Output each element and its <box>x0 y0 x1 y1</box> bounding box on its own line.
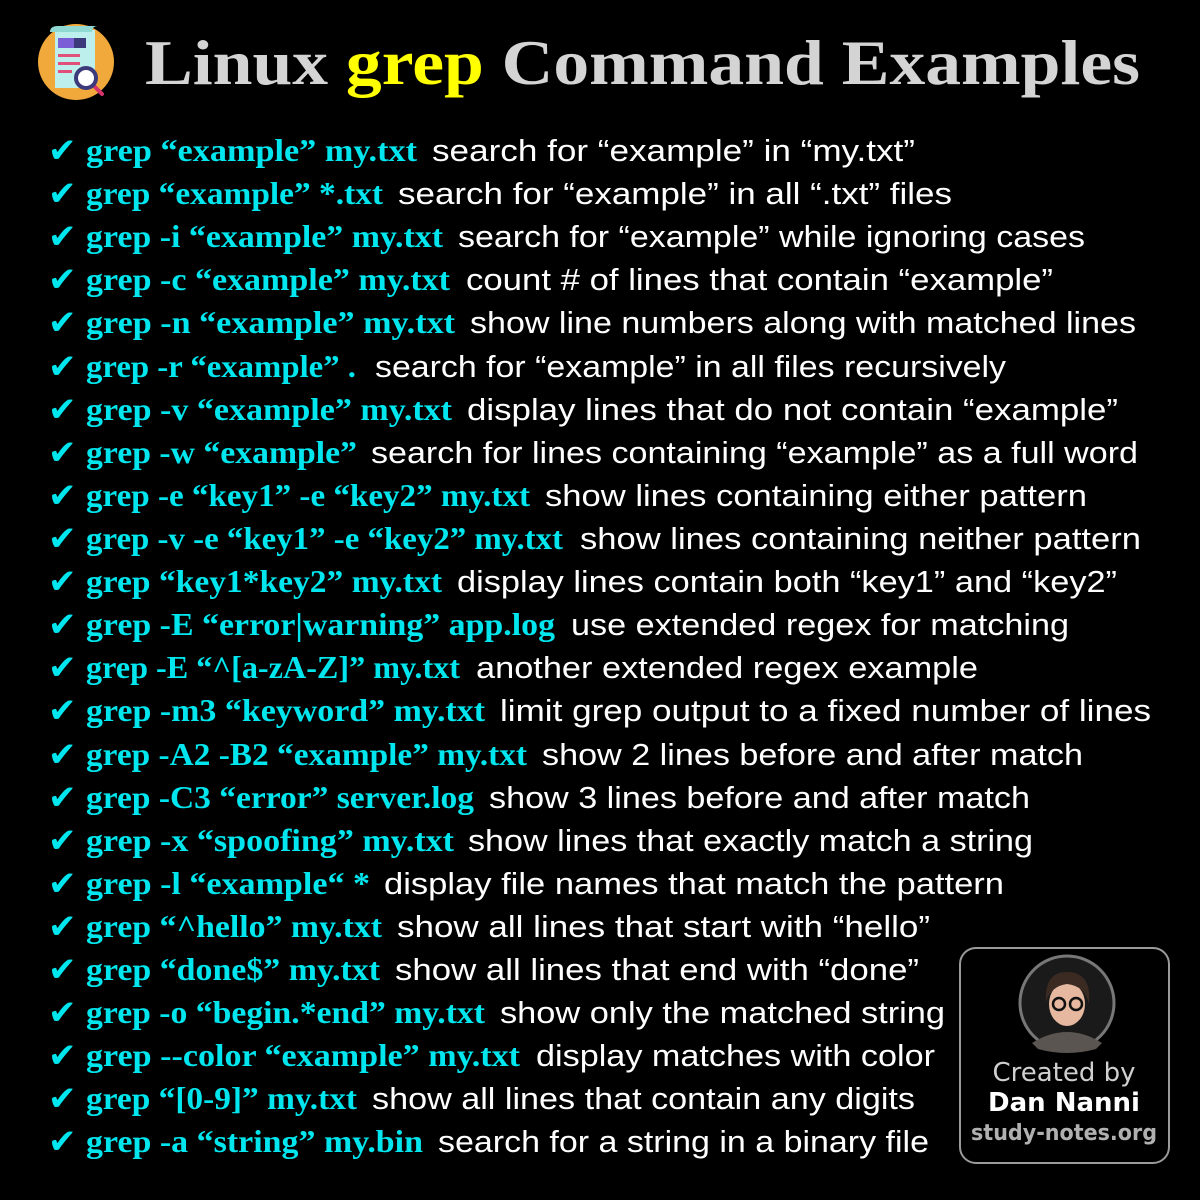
command list: ✔ <box>48 993 76 1033</box>
command list: grep “key1*key2” my.txt <box>86 563 442 599</box>
command list: display file names that match the pattern <box>384 866 1004 901</box>
command list: ✔ <box>48 864 76 904</box>
avatar <box>1020 956 1114 1053</box>
command list: grep -n “example” my.txt <box>86 304 455 340</box>
title: Linux grep Command Examples <box>145 27 1140 98</box>
command list: search for “example” in “my.txt” <box>432 133 915 168</box>
command list: search for “example” while ignoring cases <box>458 219 1085 254</box>
command list: grep -o “begin.*end” my.txt <box>86 994 485 1030</box>
command list: ✔ <box>48 476 76 516</box>
command list: show lines containing either pattern <box>545 478 1087 513</box>
command list: grep -r “example” . <box>86 348 356 384</box>
command list: ✔ <box>48 217 76 257</box>
command list: grep -E “error|warning” app.log <box>86 606 555 642</box>
command list: grep -c “example” my.txt <box>86 261 450 297</box>
command list: ✔ <box>48 821 76 861</box>
command list: display lines that do not contain “example” <box>467 392 1118 427</box>
author card <box>960 948 1169 1163</box>
command list: ✔ <box>48 347 76 387</box>
command list: ✔ <box>48 303 76 343</box>
command list: show lines containing neither pattern <box>580 521 1141 556</box>
command list: ✔ <box>48 735 76 775</box>
command list: search for lines containing “example” as a full word <box>371 435 1138 470</box>
command list: grep -w “example” <box>86 434 357 470</box>
command list: grep -m3 “keyword” my.txt <box>86 692 485 728</box>
command list: ✔ <box>48 605 76 645</box>
command list: grep “[0-9]” my.txt <box>86 1080 357 1116</box>
command list: count # of lines that contain “example” <box>466 262 1053 297</box>
command list: grep -a “string” my.bin <box>86 1123 423 1159</box>
command list: grep -l “example“ * <box>86 865 370 901</box>
command list: ✔ <box>48 950 76 990</box>
author text: Created by <box>992 1058 1136 1088</box>
command list: grep --color “example” my.txt <box>86 1037 520 1073</box>
command list: ✔ <box>48 131 76 171</box>
command list: show lines that exactly match a string <box>468 823 1033 858</box>
command list: another extended regex example <box>476 650 978 685</box>
command list: ✔ <box>48 260 76 300</box>
command list: show all lines that start with “hello” <box>397 909 930 944</box>
command list: ✔ <box>48 691 76 731</box>
command list: show 3 lines before and after match <box>489 780 1030 815</box>
command list: grep -C3 “error” server.log <box>86 779 474 815</box>
command list: show 2 lines before and after match <box>542 737 1083 772</box>
command list: search for “example” in all “.txt” files <box>398 176 952 211</box>
command list: ✔ <box>48 519 76 559</box>
icon: document with magnifier <box>38 24 114 100</box>
command list: show only the matched string <box>500 995 945 1030</box>
command list: show all lines that contain any digits <box>372 1081 915 1116</box>
command list: grep -x “spoofing” my.txt <box>86 822 454 858</box>
command list: limit grep output to a fixed number of lines <box>500 693 1151 728</box>
command list: ✔ <box>48 1079 76 1119</box>
command list: grep -v “example” my.txt <box>86 391 452 427</box>
author card: Dan Nanni <box>988 1088 1140 1118</box>
command list: grep “^hello” my.txt <box>86 908 382 944</box>
command list: grep -i “example” my.txt <box>86 218 443 254</box>
command list: ✔ <box>48 1122 76 1162</box>
command list: grep -v -e “key1” -e “key2” my.txt <box>86 520 563 556</box>
command list: show line numbers along with matched lines <box>470 305 1136 340</box>
command list: display lines contain both “key1” and “key2” <box>457 564 1117 599</box>
command list: grep “example” *.txt <box>86 175 383 211</box>
command list: ✔ <box>48 390 76 430</box>
command list: ✔ <box>48 562 76 602</box>
command list: ✔ <box>48 778 76 818</box>
command list: ✔ <box>48 433 76 473</box>
command list: show all lines that end with “done” <box>395 952 919 987</box>
command list: search for “example” in all files recursively <box>375 349 1007 384</box>
author card: study-notes.org <box>971 1121 1157 1146</box>
command list: grep -A2 -B2 “example” my.txt <box>86 736 527 772</box>
command list: grep -E “^[a-zA-Z]” my.txt <box>86 649 460 685</box>
command list: search for a string in a binary file <box>438 1124 929 1159</box>
command list <box>48 131 1151 1162</box>
command list: ✔ <box>48 1036 76 1076</box>
command list: ✔ <box>48 907 76 947</box>
command list: ✔ <box>48 174 76 214</box>
command list: grep “example” my.txt <box>86 132 417 168</box>
command list: display matches with color <box>536 1038 935 1073</box>
command list: grep -e “key1” -e “key2” my.txt <box>86 477 530 513</box>
command list: ✔ <box>48 648 76 688</box>
command list: grep “done$” my.txt <box>86 951 380 987</box>
command list: use extended regex for matching <box>571 607 1069 642</box>
